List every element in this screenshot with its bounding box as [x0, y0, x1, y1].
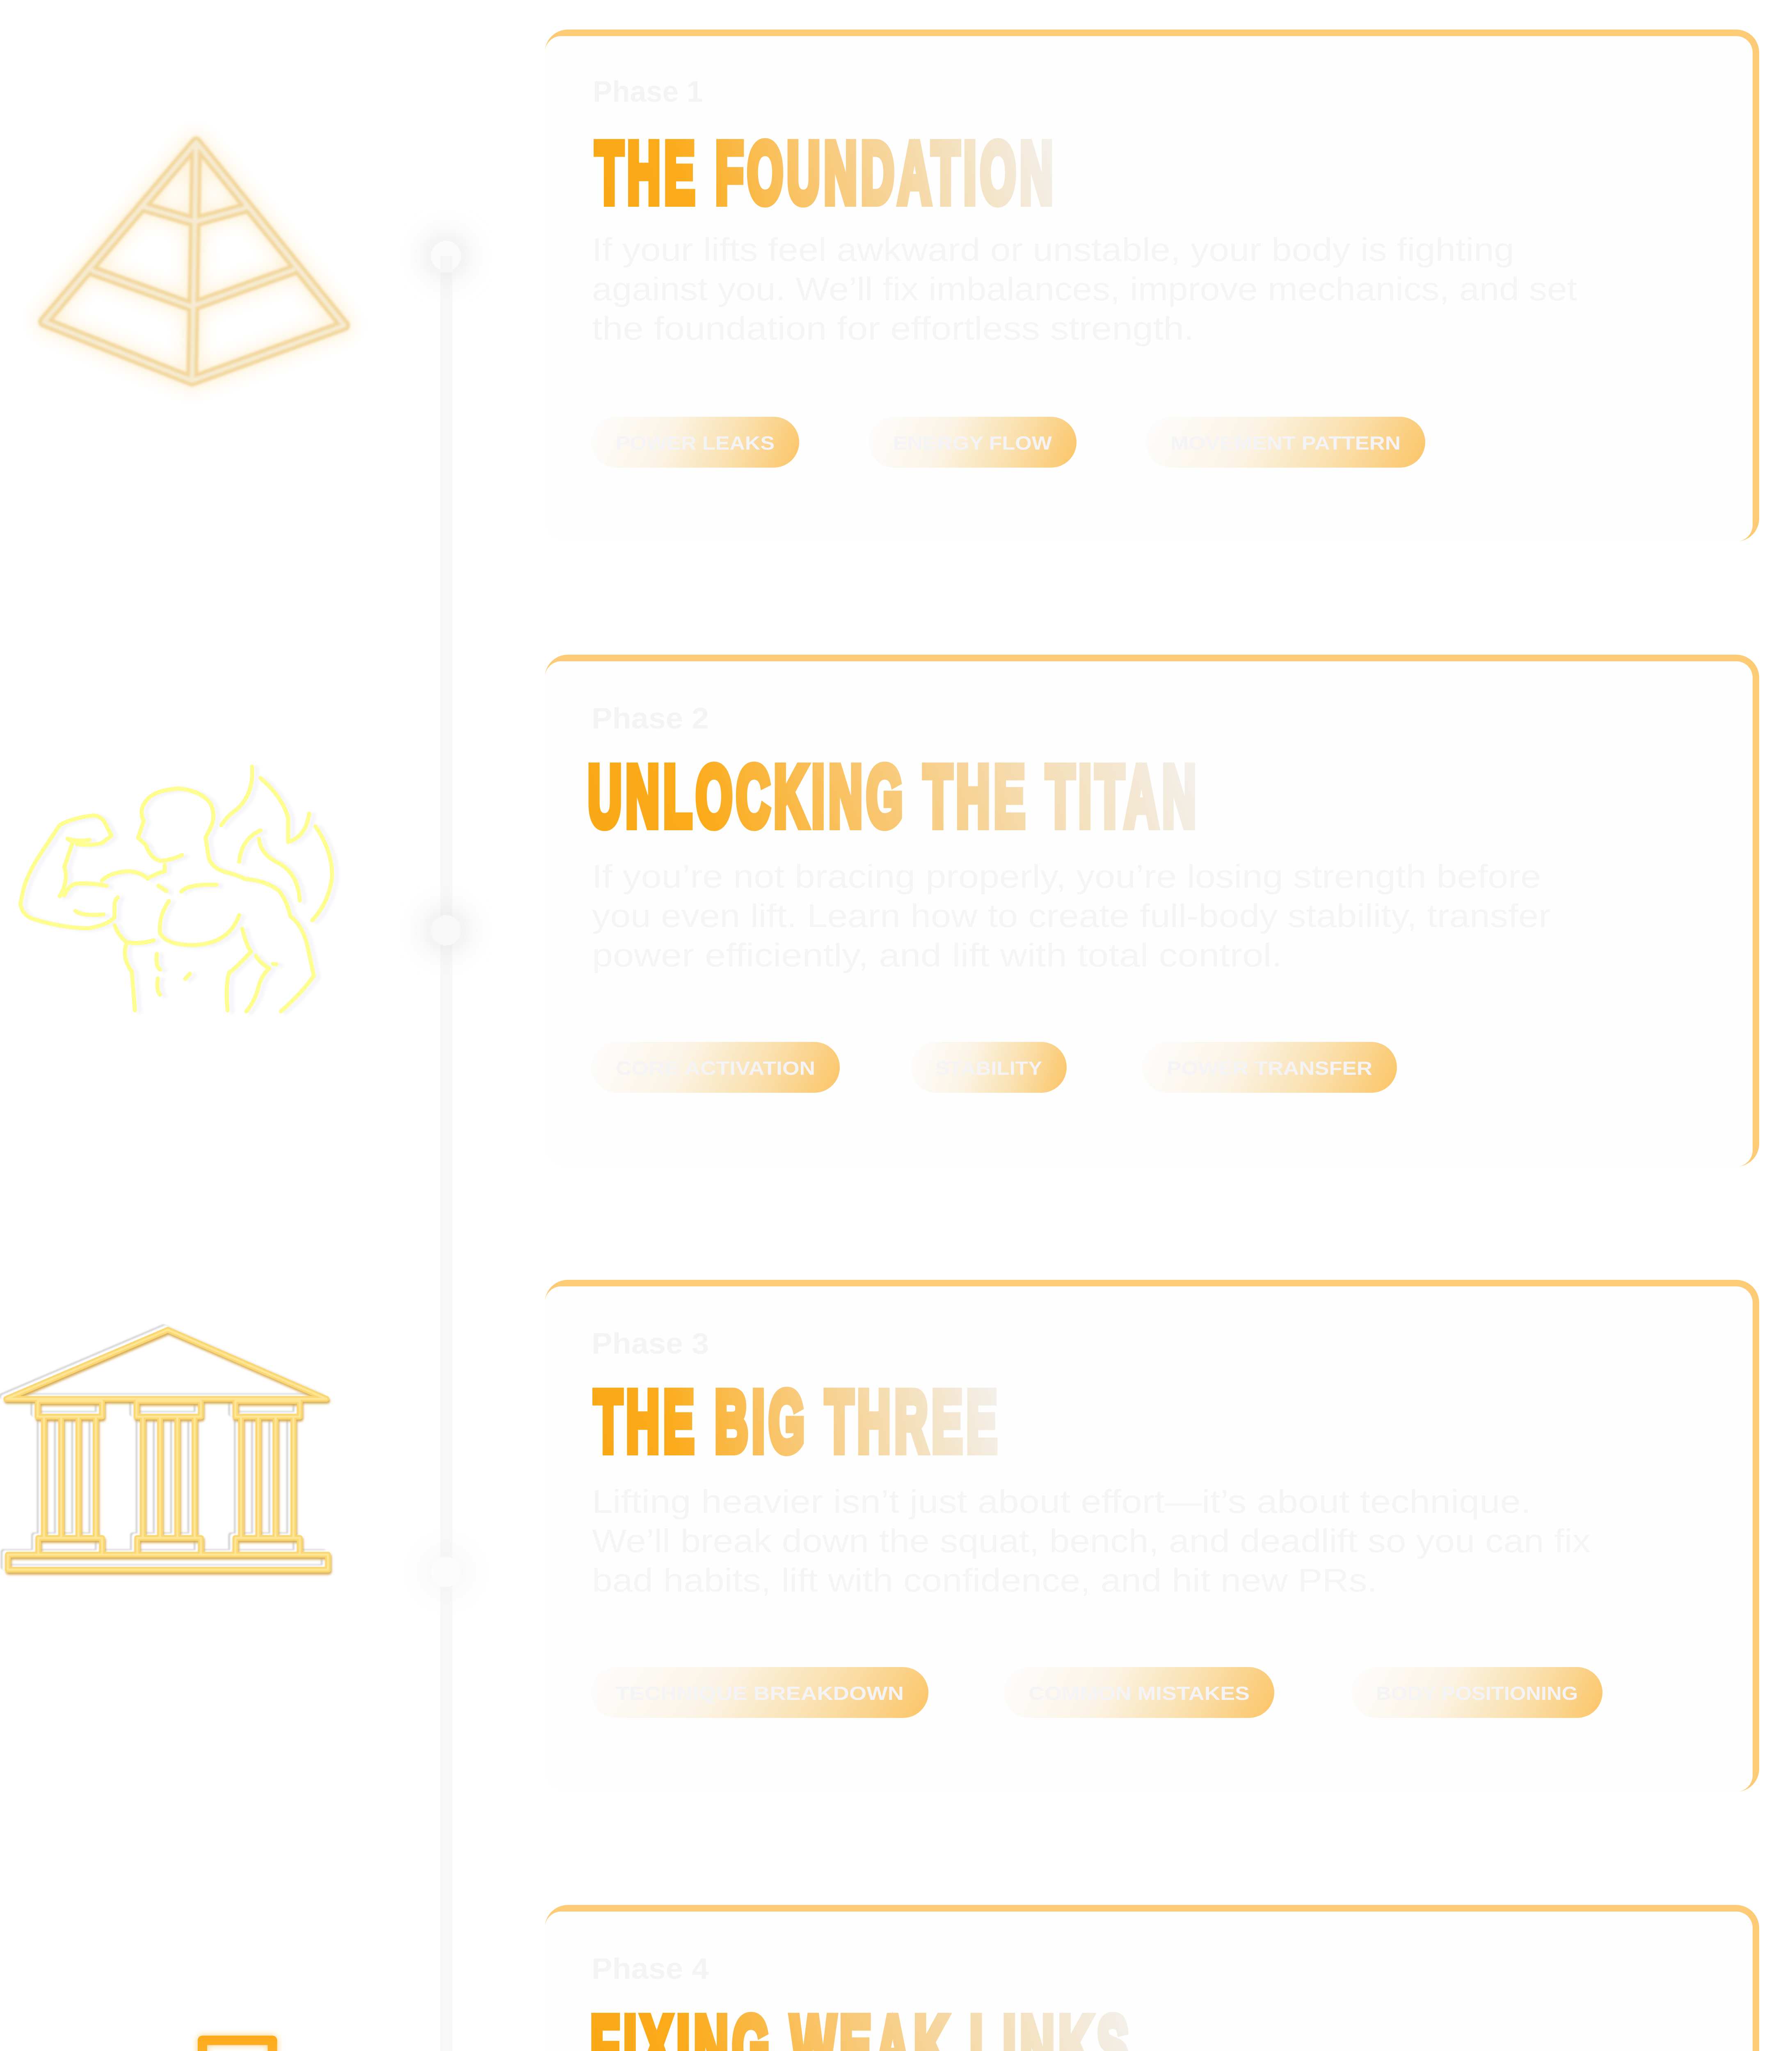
heading: THE BIG THREE	[594, 1373, 1001, 1470]
timeline: vertical line with five dots	[421, 231, 471, 2051]
tag: power transfer: POWER TRANSFER	[1167, 1057, 1372, 1079]
description: power efficiently, and lift with total control.	[592, 937, 1282, 973]
phase label: Phase 2	[592, 702, 709, 735]
tag: body positioning	[1351, 1667, 1602, 1718]
tag: energy flow: ENERGY FLOW	[893, 432, 1052, 454]
phase label: Phase 3	[592, 1327, 709, 1360]
tag: power leaks: POWER LEAKS	[616, 432, 775, 454]
heading: THE FOUNDATION	[595, 124, 1057, 221]
timeline dot 2	[421, 906, 471, 955]
tag: common mistakes: COMMON MISTAKES	[1029, 1683, 1250, 1704]
description	[592, 231, 1577, 347]
phase label: Phase 1	[593, 75, 703, 108]
tag: power leaks	[591, 417, 799, 468]
tag: movement pattern	[1146, 417, 1425, 468]
icon: temple columns	[2, 1327, 329, 1572]
description: We’ll break down the squat, bench, and deadlift so you can fix	[592, 1523, 1591, 1559]
tag: power transfer	[1142, 1042, 1397, 1093]
description: against you. We’ll fix imbalances, improve mechanics, and set	[592, 271, 1577, 307]
icon: titan with flames	[21, 767, 336, 1013]
description	[592, 858, 1551, 973]
description: you even lift. Learn how to create full-body stability, transfer	[592, 898, 1551, 934]
timeline dot 1	[421, 231, 471, 281]
icon: pyramid	[44, 142, 344, 381]
description: the foundation for effortless strength.	[592, 310, 1194, 347]
panel: phase 3	[545, 1280, 1759, 1792]
tag: core activation: CORE ACTIVATION	[616, 1057, 815, 1079]
description	[592, 1483, 1591, 1599]
panel: phase 1	[545, 30, 1759, 541]
tag: energy flow	[869, 417, 1077, 468]
icon: heart, cross, bandage and broken chain	[23, 2040, 333, 2051]
tag: core activation	[591, 1042, 840, 1093]
panel: phase 2	[545, 655, 1759, 1167]
cross and heart	[79, 2040, 333, 2051]
tag: technique breakdown	[591, 1667, 928, 1718]
tag: movement pattern: MOVEMENT PATTERN	[1170, 432, 1401, 454]
description: If your lifts feel awkward or unstable, your body is fighting	[592, 231, 1514, 268]
tag: body positioning: BODY POSITIONING	[1376, 1683, 1578, 1704]
tag: common mistakes	[1004, 1667, 1274, 1718]
description: Lifting heavier isn’t just about effort—it’s about technique.	[592, 1483, 1531, 1520]
description: If you’re not bracing properly, you’re losing strength before	[592, 858, 1541, 895]
description: bad habits, lift with confidence, and hit new PRs.	[592, 1562, 1377, 1599]
heading: UNLOCKING THE TITAN	[588, 748, 1200, 845]
timeline line	[440, 256, 453, 2051]
panel: phase 4	[545, 1905, 1759, 2051]
tag: stability: STABILITY	[935, 1057, 1042, 1079]
timeline dot 3	[421, 1547, 471, 1596]
tag: stability	[911, 1042, 1067, 1093]
tag: technique breakdown: TECHNIQUE BREAKDOWN	[616, 1683, 904, 1704]
phase label: Phase 4	[592, 1953, 709, 1985]
